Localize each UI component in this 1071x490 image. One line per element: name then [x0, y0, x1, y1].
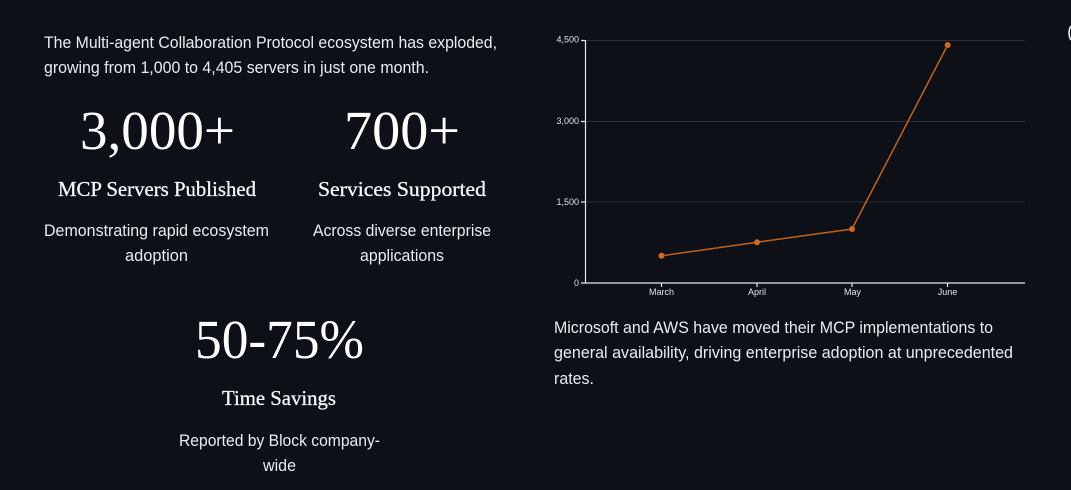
intro text: The Multi-agent Collaboration Protocol ecosystem has exploded,	[44, 34, 497, 52]
stat: time savings: 50-75%	[195, 309, 364, 370]
stat: MCP servers published	[44, 100, 269, 265]
edge fragment	[1069, 26, 1071, 40]
intro text: growing from 1,000 to 4,405 servers in just one month.	[44, 59, 429, 77]
y-axis labels: 4,500	[556, 34, 579, 44]
chart commentary: Microsoft and AWS have moved their MCP implementations to	[554, 319, 993, 337]
line chart: server growth	[556, 34, 1025, 297]
stat: services supported: Across diverse enterprise	[313, 222, 491, 240]
x-axis labels: May	[844, 287, 861, 297]
stat: services supported: Services Supported	[318, 177, 487, 201]
stat: services supported: 700+	[344, 100, 460, 161]
data points	[658, 42, 951, 259]
y-axis labels: 1,500	[556, 197, 579, 207]
stat: MCP servers published: 3,000+	[80, 100, 235, 161]
chart axes	[581, 40, 1025, 287]
y-axis labels: 0	[574, 278, 579, 288]
x-axis labels: June	[938, 287, 957, 297]
data line	[662, 45, 948, 256]
intro text	[44, 34, 497, 77]
y-axis labels: 3,000	[556, 116, 579, 126]
x-axis labels	[649, 287, 957, 297]
x-axis labels: March	[649, 287, 674, 297]
stat: MCP servers published: MCP Servers Published	[58, 177, 256, 201]
y-axis labels	[556, 34, 579, 288]
stat: time savings: Reported by Block company-	[179, 432, 380, 450]
stat: time savings: Time Savings	[222, 386, 336, 410]
chart commentary: rates.	[554, 370, 594, 388]
chart commentary: general availability, driving enterprise adoption at unprecedented	[554, 344, 1013, 362]
x-axis labels: April	[748, 287, 766, 297]
stat: services supported	[313, 100, 491, 265]
stat: time savings: wide	[262, 457, 296, 475]
stat: MCP servers published: adoption	[125, 247, 188, 265]
stat: MCP servers published: Demonstrating rapid ecosystem	[44, 222, 269, 240]
chart commentary	[554, 319, 1013, 388]
stat: services supported: applications	[360, 247, 444, 265]
stat: time savings	[179, 309, 380, 475]
